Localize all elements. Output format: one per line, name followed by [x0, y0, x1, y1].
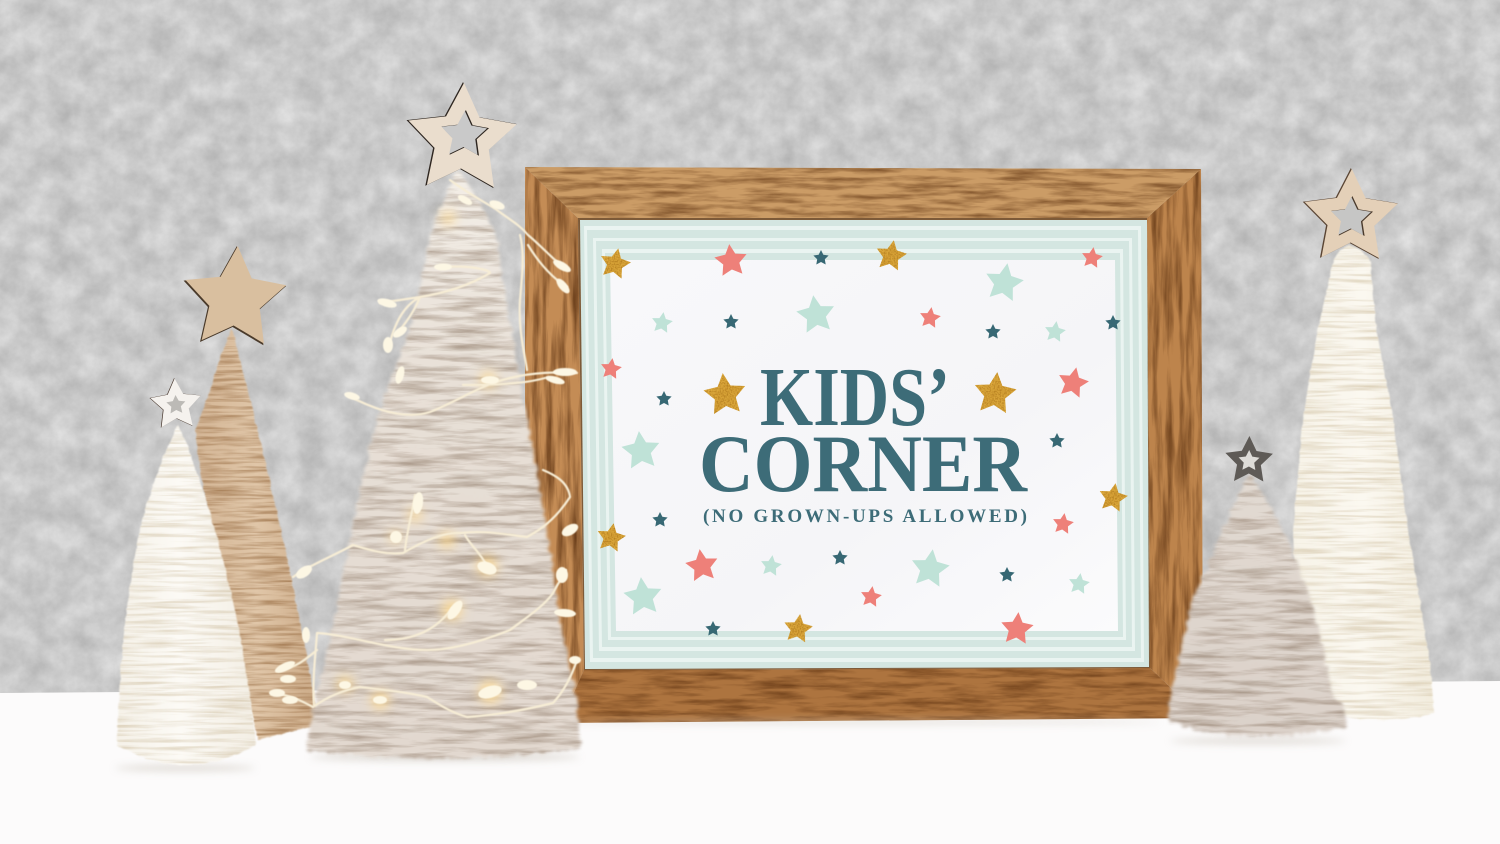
mint stars [620, 260, 1091, 615]
sign title: kids' corner: (NO GROWN-UPS ALLOWED) [703, 506, 1027, 527]
sign title: kids' corner: KIDS’ [760, 351, 950, 444]
warm light glows [338, 212, 500, 708]
gold glitter stars [595, 238, 1130, 643]
icon: solid wood star [180, 243, 288, 346]
frame bottom rail [560, 668, 1203, 723]
small fluffy tree right [1168, 436, 1348, 736]
frame top rail [525, 167, 1201, 218]
fairy light strands [272, 180, 577, 717]
icon: wooden star right [1302, 167, 1398, 259]
wooden picture frame [525, 167, 1203, 723]
white table top [0, 681, 1500, 844]
white yarn tree [117, 377, 256, 765]
icon: wooden cut-out star [404, 80, 518, 189]
sign title: kids' corner [699, 351, 1028, 527]
fairy light bulbs [269, 193, 581, 704]
tan yarn tree [180, 243, 318, 740]
sign title: kids' corner: CORNER [699, 418, 1028, 509]
frame right rail [1147, 169, 1203, 718]
icon: dark grey star [1225, 436, 1273, 482]
table shadows [115, 720, 1346, 771]
coral stars [599, 242, 1104, 644]
tall cream yarn tree [1293, 167, 1434, 720]
large fluffy tree with lights [269, 80, 581, 759]
dark teal stars [652, 250, 1121, 635]
icon: small white star [148, 377, 202, 428]
kids' corner print [578, 218, 1150, 670]
frame left rail [525, 167, 584, 723]
